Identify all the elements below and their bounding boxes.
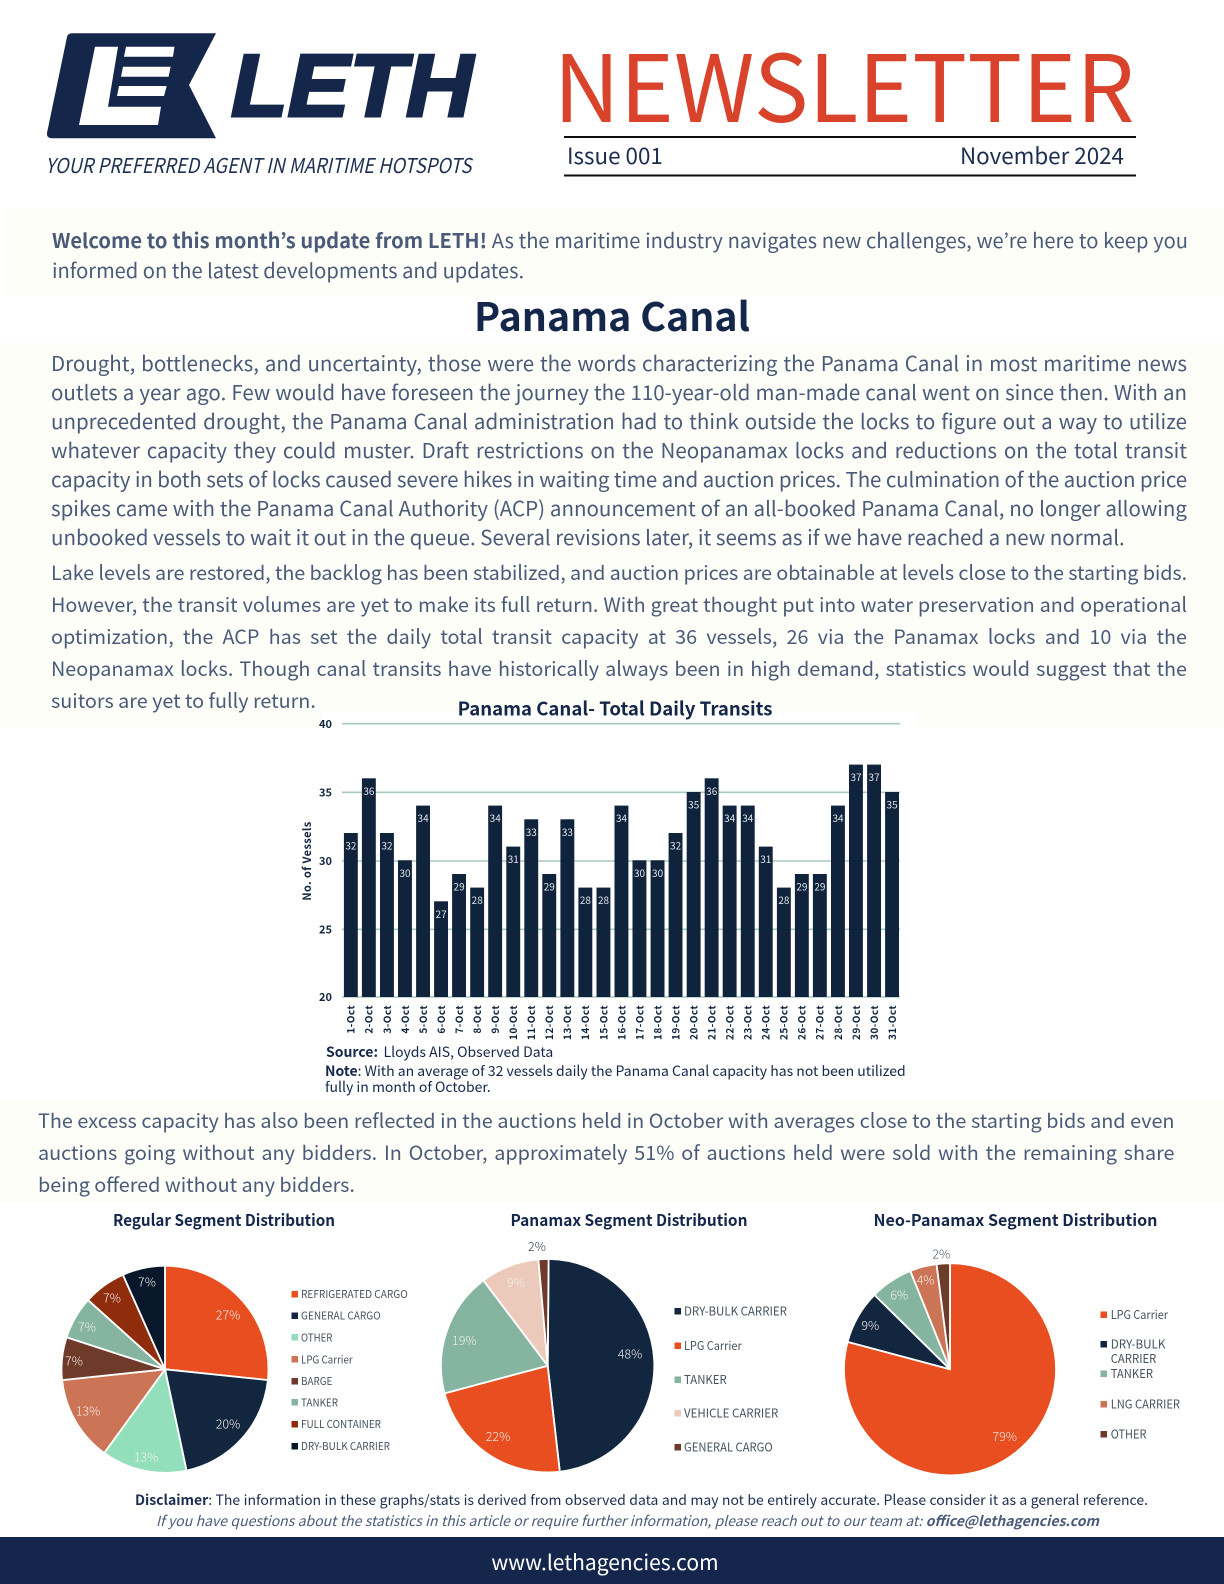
bar value labels: 33 bbox=[526, 824, 537, 839]
disclaimer: Disclaimer: The information in these graphs/stats is derived from observed data and may not be entirely accurate. Please consider it as a general reference. bbox=[135, 1490, 1148, 1510]
footer bar bbox=[0, 1537, 1224, 1584]
y axis labels: 25 bbox=[319, 922, 332, 938]
text block: article paragraph 2: Lake levels are restored, the backlog has been stabilized, and auction prices are obtainable at levels close to the starting bids. bbox=[51, 557, 1187, 586]
x axis date labels bbox=[343, 1005, 899, 1040]
percent labels: 13% bbox=[76, 1400, 100, 1420]
percent labels: 9% bbox=[507, 1272, 525, 1291]
text block: article paragraph 1 bbox=[51, 346, 1187, 550]
legend: REFRIGERATED CARGO bbox=[301, 1286, 408, 1302]
x axis date labels: 2-Oct bbox=[361, 1005, 376, 1034]
percent labels: 27% bbox=[216, 1304, 240, 1324]
legend: TANKER bbox=[684, 1371, 727, 1388]
pie slices bbox=[441, 1259, 654, 1472]
title: NEWSLETTER: NEWSLETTER bbox=[554, 14, 1134, 149]
chart title: Panama Canal- Total Daily Transits bbox=[458, 694, 772, 722]
bar value labels: 34 bbox=[832, 810, 844, 825]
text block: article paragraph 1: capacity in both sets of locks caused severe hikes in waiting time and auction prices. The culmination of the auction price bbox=[51, 462, 1187, 492]
legend: CARRIER bbox=[1111, 1350, 1157, 1367]
bar value labels: 27 bbox=[436, 906, 447, 921]
text block: article paragraph 2: However, the transit volumes are yet to make its full return. With great thought put into water preservation and operational bbox=[51, 589, 1187, 618]
bar value labels: 29 bbox=[814, 878, 825, 894]
percent labels: 7% bbox=[78, 1316, 96, 1336]
percent labels: 19% bbox=[452, 1330, 477, 1349]
heading: Panama Canal: Panama Canal bbox=[474, 286, 750, 343]
header graphic bbox=[46, 14, 1136, 179]
bar value labels: 37 bbox=[869, 769, 880, 784]
legend bbox=[674, 1302, 787, 1455]
bar value labels: 31 bbox=[508, 851, 519, 866]
x axis date labels: 7-Oct bbox=[451, 1005, 466, 1034]
bar value labels: 28 bbox=[598, 892, 609, 907]
bar value labels: 34 bbox=[490, 810, 501, 825]
bar value labels: 31 bbox=[760, 851, 771, 866]
bar value labels: 30 bbox=[652, 865, 664, 880]
percent labels: 7% bbox=[138, 1272, 156, 1290]
percent labels: 2% bbox=[528, 1236, 546, 1255]
legend: TANKER bbox=[1111, 1365, 1153, 1382]
x axis date labels: 27-Oct bbox=[812, 1005, 827, 1040]
text block: article paragraph 1: whatever capacity they could muster. Draft restrictions on the Neopanamax locks and reductions on the total transit bbox=[51, 434, 1187, 464]
legend: LPG Carrier bbox=[1111, 1306, 1168, 1323]
bar value labels: 29 bbox=[796, 878, 807, 894]
bar value labels: 30 bbox=[399, 865, 411, 880]
text block: welcome: informed on the latest developments and updates. bbox=[52, 255, 524, 284]
text block: welcome bbox=[52, 225, 1188, 284]
footer bar: www.lethagencies.com bbox=[491, 1547, 719, 1577]
issue bar: Issue 001 bbox=[567, 139, 663, 171]
chart title: Panamax Segment Distribution bbox=[510, 1207, 748, 1231]
x axis date labels: 30-Oct bbox=[866, 1005, 881, 1040]
legend: DRY-BULK bbox=[1111, 1335, 1166, 1352]
text block: auctions paragraph: The excess capacity has also been reflected in the auctions held in October with averages close to the starting bids and even bbox=[38, 1105, 1174, 1134]
percent labels: 22% bbox=[486, 1426, 510, 1445]
x axis date labels: 25-Oct bbox=[776, 1005, 791, 1040]
pie chart: regular segment bbox=[61, 1207, 408, 1473]
legend bbox=[1100, 1306, 1180, 1442]
percent labels: 7% bbox=[103, 1288, 121, 1306]
bars bbox=[344, 765, 899, 997]
legend bbox=[292, 1286, 408, 1454]
percent labels: 13% bbox=[134, 1446, 158, 1466]
bar value labels: 35 bbox=[688, 796, 700, 812]
x axis date labels: 17-Oct bbox=[631, 1005, 646, 1040]
x axis date labels: 3-Oct bbox=[379, 1005, 394, 1034]
x axis date labels: 21-Oct bbox=[704, 1005, 718, 1040]
bar value labels: 29 bbox=[544, 878, 555, 894]
text block: article paragraph 2: suitors are yet to fully return. bbox=[51, 685, 316, 714]
pie chart: neo-panamax segment bbox=[844, 1207, 1180, 1475]
y axis title: No. of Vessels bbox=[299, 821, 315, 901]
text block: article paragraph 2: optimization, the ACP has set the daily total transit capacity at 36 vessels, 26 via the Panamax locks and 10 via the bbox=[51, 621, 1187, 650]
percent labels bbox=[861, 1244, 1017, 1445]
bar value labels: 28 bbox=[580, 892, 591, 907]
x axis date labels: 11-Oct bbox=[523, 1005, 538, 1040]
legend: DRY-BULK CARRIER bbox=[301, 1438, 390, 1454]
disclaimer bbox=[135, 1490, 1148, 1531]
percent labels: 6% bbox=[890, 1284, 908, 1304]
x axis date labels: 14-Oct bbox=[577, 1005, 592, 1040]
x axis date labels: 10-Oct bbox=[505, 1005, 520, 1040]
x axis date labels: 26-Oct bbox=[794, 1005, 809, 1040]
legend: OTHER bbox=[301, 1329, 332, 1345]
y axis labels bbox=[319, 716, 332, 1005]
x axis date labels: 19-Oct bbox=[667, 1005, 682, 1040]
text block: article paragraph 1: unprecedented drought, the Panama Canal administration had to think outside the locks to figure out a way to utilize bbox=[51, 404, 1187, 434]
bar value labels: 37 bbox=[850, 769, 862, 784]
x axis date labels: 8-Oct bbox=[469, 1005, 484, 1034]
panel: auctions text background bbox=[0, 1101, 1224, 1202]
text block: article paragraph 2: Neopanamax locks. Though canal transits have historically always been in high demand, statistics would suggest that the bbox=[51, 653, 1187, 682]
x axis date labels: 24-Oct bbox=[758, 1005, 773, 1040]
x axis date labels: 23-Oct bbox=[740, 1005, 755, 1040]
x axis date labels: 13-Oct bbox=[559, 1005, 574, 1040]
bar value labels: 28 bbox=[472, 892, 483, 907]
tagline: YOUR PREFERRED AGENT IN MARITIME HOTSPOTS bbox=[46, 149, 474, 179]
percent labels bbox=[65, 1272, 240, 1466]
x axis date labels: 12-Oct bbox=[541, 1005, 556, 1040]
chart title: Regular Segment Distribution bbox=[113, 1207, 335, 1231]
y axis labels: 35 bbox=[319, 784, 332, 800]
source and note: Source: Lloyds AIS, Observed Data bbox=[326, 1042, 553, 1062]
bar value labels: 34 bbox=[418, 810, 429, 825]
legend: LNG CARRIER bbox=[1111, 1395, 1180, 1412]
percent labels: 9% bbox=[861, 1315, 879, 1334]
x axis date labels: 4-Oct bbox=[397, 1005, 412, 1034]
legend: DRY-BULK CARRIER bbox=[684, 1302, 787, 1320]
pie chart: panamax segment bbox=[441, 1207, 787, 1472]
text block: article paragraph 1: Drought, bottlenecks, and uncertainty, those were the words characterizing the Panama Canal in most maritime news bbox=[51, 346, 1187, 376]
disclaimer: If you have questions about the statistics in this article or require further information, please reach out to our team at: office@lethagencies.com bbox=[156, 1511, 1099, 1531]
bar value labels: 33 bbox=[562, 824, 573, 839]
percent labels bbox=[452, 1236, 642, 1445]
issue bar: November 2024 bbox=[960, 139, 1124, 171]
x axis date labels: 5-Oct bbox=[415, 1005, 430, 1034]
bar value labels: 34 bbox=[616, 810, 627, 825]
y axis labels: 30 bbox=[319, 853, 332, 869]
bar value labels bbox=[345, 769, 898, 921]
legend: GENERAL CARGO bbox=[684, 1438, 773, 1455]
percent labels: 7% bbox=[65, 1350, 83, 1370]
x axis date labels: 1-Oct bbox=[343, 1005, 358, 1034]
legend: FULL CONTAINER bbox=[301, 1416, 381, 1432]
bar value labels: 36 bbox=[706, 783, 718, 798]
bar value labels: 34 bbox=[742, 810, 754, 825]
bar value labels: 30 bbox=[634, 865, 645, 880]
legend: GENERAL CARGO bbox=[301, 1308, 381, 1324]
pie slices bbox=[61, 1266, 268, 1473]
bar value labels: 32 bbox=[381, 838, 393, 852]
legend: TANKER bbox=[301, 1394, 338, 1410]
x axis date labels: 31-Oct bbox=[884, 1005, 899, 1040]
x axis date labels: 15-Oct bbox=[595, 1005, 610, 1040]
bar value labels: 35 bbox=[887, 796, 898, 812]
text block: article paragraph 1: unbooked vessels to wait it out in the queue. Several revisions later, it seems as if we have reached a new normal. bbox=[51, 520, 1125, 550]
logo wordmark: LETH bbox=[231, 36, 476, 135]
legend: BARGE bbox=[301, 1373, 332, 1389]
text block: article paragraph 1: spikes came with the Panama Canal Authority (ACP) announcement of an all-booked Panama Canal, no longer allowing bbox=[51, 492, 1187, 522]
x axis date labels: 9-Oct bbox=[487, 1005, 502, 1034]
legend: VEHICLE CARRIER bbox=[684, 1404, 779, 1421]
pie slices bbox=[844, 1263, 1056, 1475]
source and note bbox=[325, 1042, 906, 1097]
x axis date labels: 22-Oct bbox=[722, 1005, 736, 1040]
percent labels: 4% bbox=[917, 1270, 935, 1288]
percent labels: 2% bbox=[932, 1244, 950, 1262]
source and note: Note: With an average of 32 vessels daily the Panama Canal capacity has not been utilized bbox=[325, 1061, 906, 1081]
legend: LPG Carrier bbox=[684, 1337, 742, 1354]
text block: article paragraph 1: outlets a year ago. Few would have foreseen the journey the 110-year-old man-made canal went on since then. With an bbox=[51, 376, 1187, 406]
source and note: fully in month of October. bbox=[325, 1077, 491, 1097]
text block: auctions paragraph: being offered without any bidders. bbox=[38, 1169, 355, 1198]
issue bar bbox=[564, 136, 1136, 176]
text block: welcome: Welcome to this month’s update from LETH! As the maritime industry navigates new challenges, we’re here to keep you bbox=[52, 225, 1188, 254]
legend: OTHER bbox=[1111, 1425, 1147, 1442]
text block: auctions paragraph bbox=[38, 1105, 1174, 1198]
bar value labels: 32 bbox=[345, 838, 357, 852]
bar value labels: 29 bbox=[454, 878, 465, 894]
panel: Panama Canal article background bbox=[0, 343, 1224, 727]
x axis date labels: 6-Oct bbox=[433, 1005, 448, 1034]
y axis labels: 20 bbox=[319, 989, 332, 1005]
bar value labels: 36 bbox=[363, 783, 375, 798]
x axis date labels: 20-Oct bbox=[686, 1005, 700, 1040]
bar value labels: 34 bbox=[724, 810, 736, 825]
legend: LPG Carrier bbox=[301, 1351, 353, 1367]
chart title: Neo-Panamax Segment Distribution bbox=[874, 1207, 1158, 1231]
percent labels: 79% bbox=[992, 1426, 1017, 1445]
logo: LETH emblem bbox=[47, 33, 216, 138]
x axis date labels: 28-Oct bbox=[830, 1005, 845, 1040]
bar value labels: 28 bbox=[778, 892, 790, 907]
x axis date labels: 29-Oct bbox=[848, 1005, 863, 1040]
panel: welcome background bbox=[3, 208, 1224, 295]
percent labels: 20% bbox=[216, 1414, 240, 1432]
x axis date labels: 18-Oct bbox=[649, 1005, 664, 1040]
y axis labels: 40 bbox=[319, 716, 332, 732]
text block: auctions paragraph: auctions going without any bidders. In October, approximately 51% of auctions held were sold with the remaining share bbox=[38, 1137, 1174, 1166]
percent labels: 48% bbox=[618, 1344, 642, 1362]
x axis date labels: 16-Oct bbox=[613, 1005, 628, 1040]
bar value labels: 32 bbox=[670, 838, 682, 852]
text block: article paragraph 2 bbox=[51, 557, 1187, 714]
